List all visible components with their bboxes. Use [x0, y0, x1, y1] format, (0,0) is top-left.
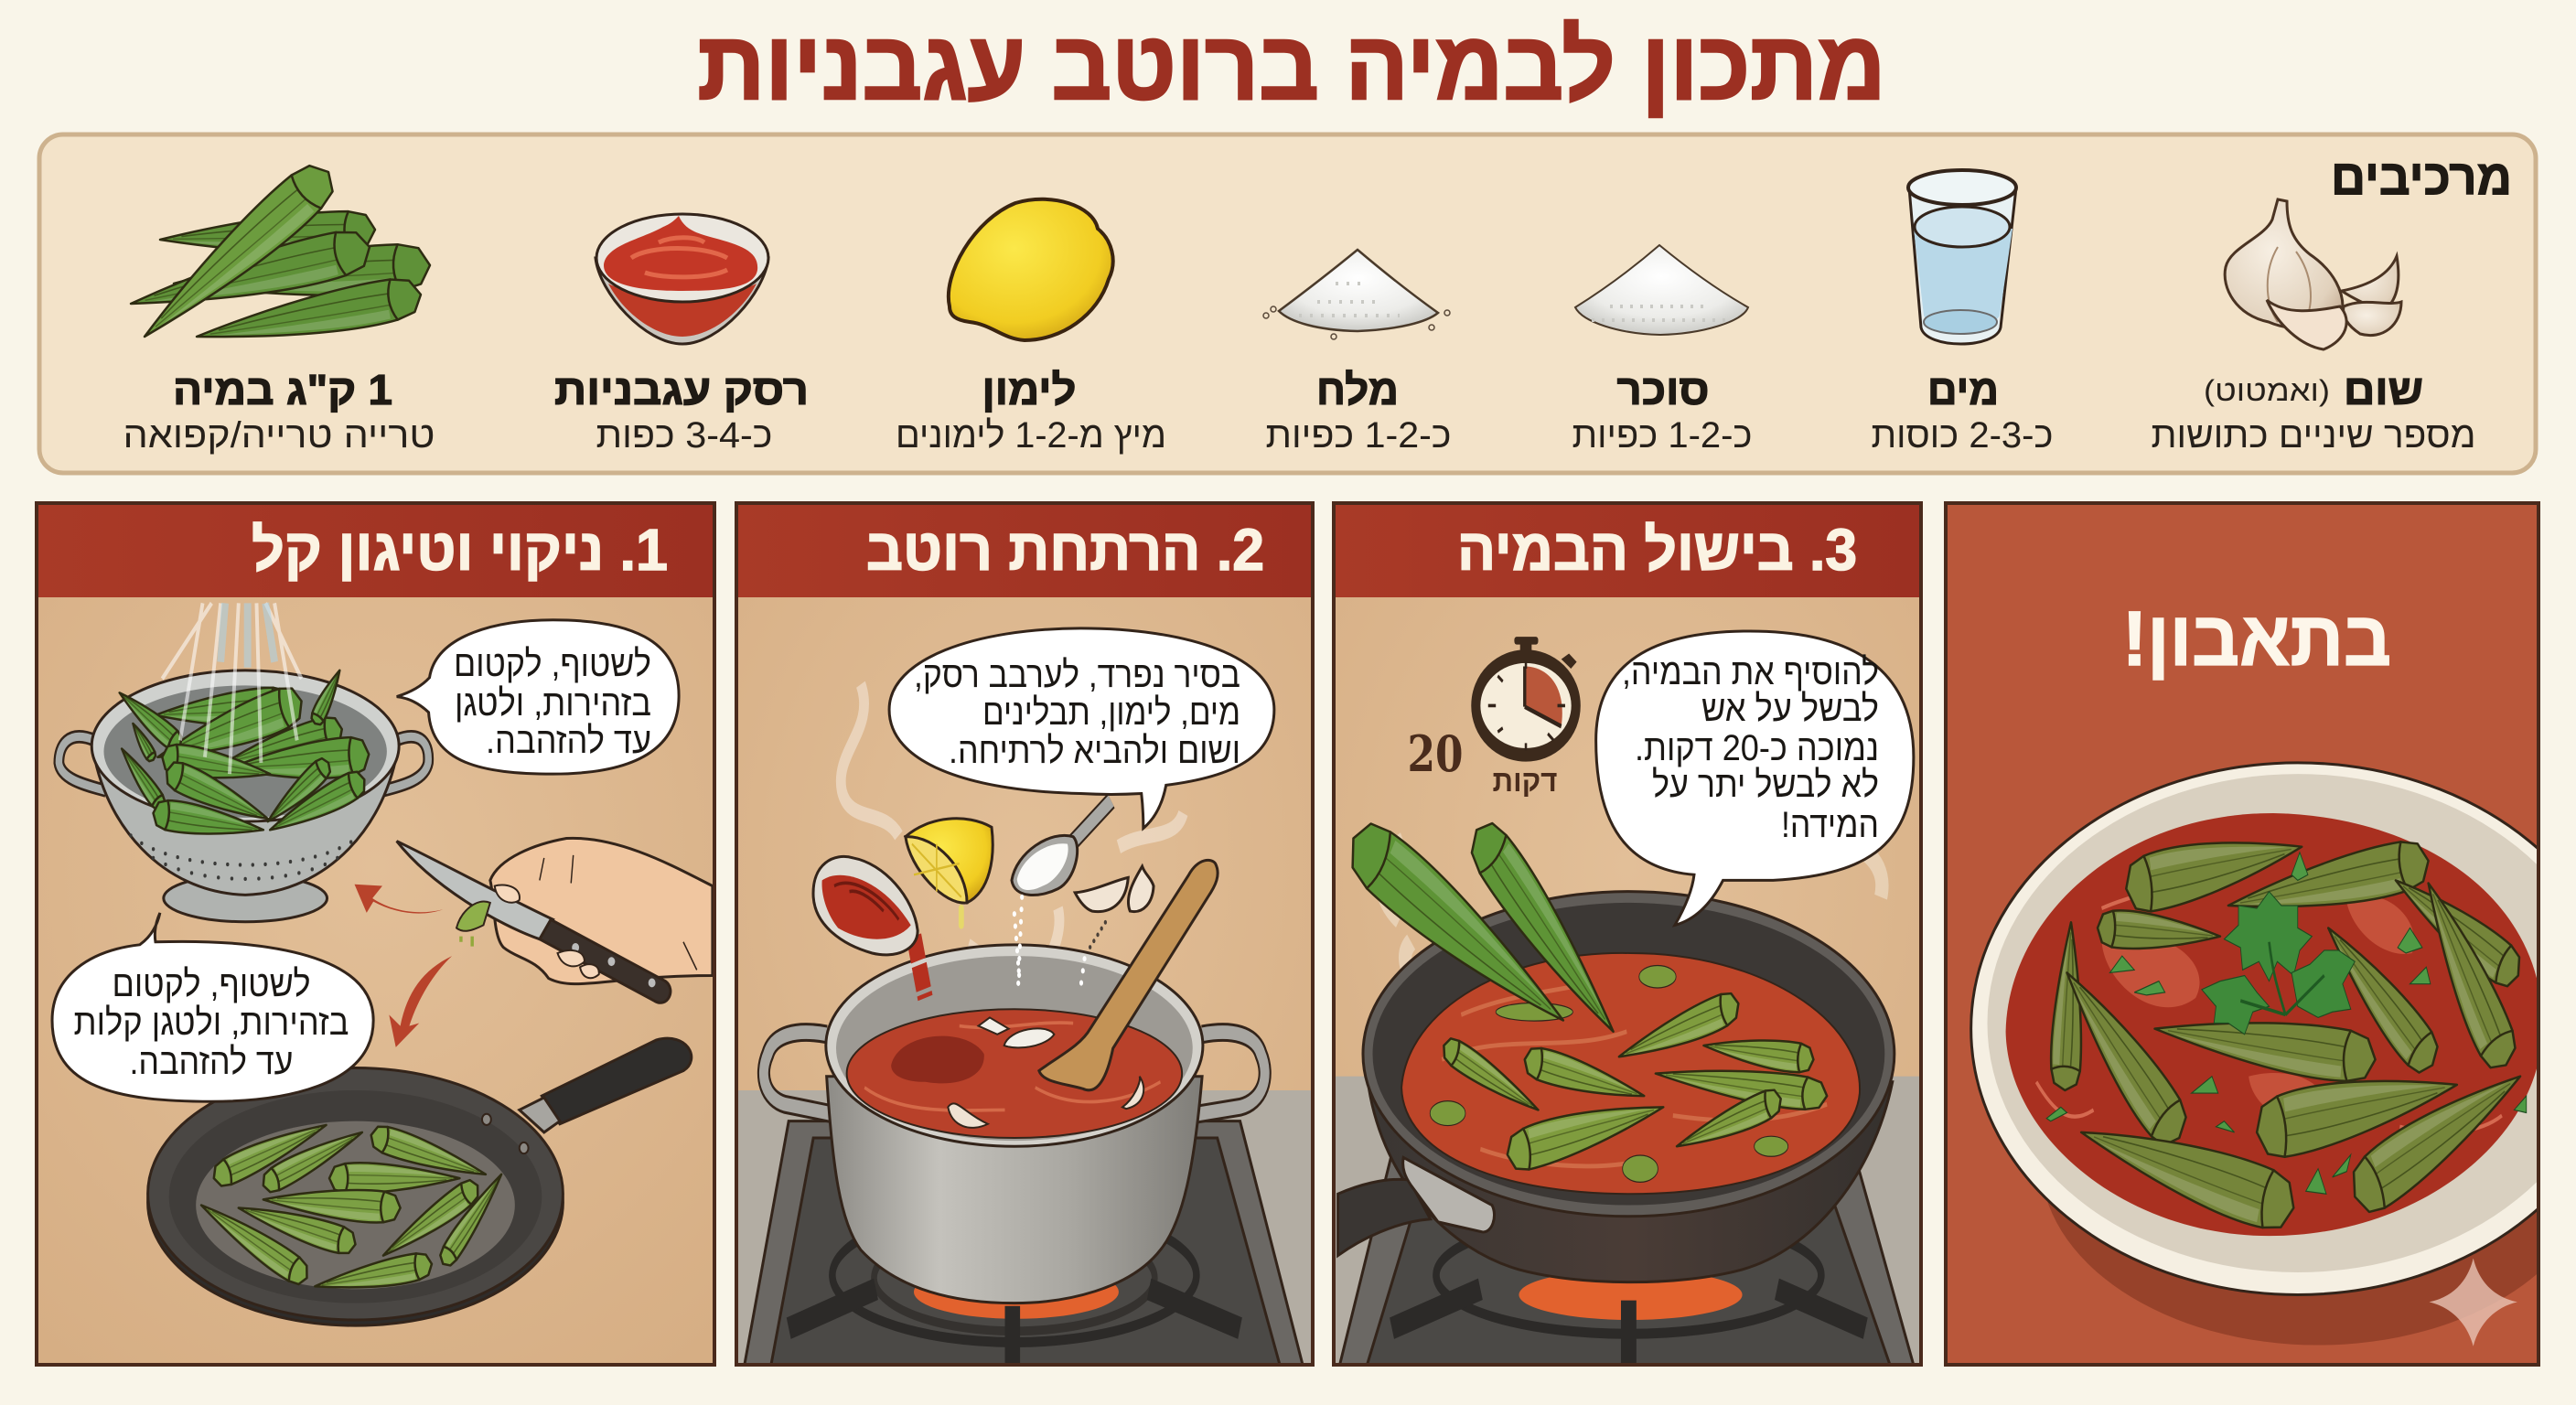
- panel: ingredients: [39, 134, 2536, 473]
- panel: step 1: [37, 503, 714, 1365]
- title: מתכון לבמיה ברוטב עגבניות: [697, 12, 1886, 120]
- callout: step 1 fry: בזהירות, ולטגן קלות: [73, 1003, 349, 1043]
- ingredient: water glass: מים: [1927, 366, 1999, 413]
- callout: step 3: לא לבשל יתר על: [1652, 765, 1879, 805]
- panel: step 2: [732, 503, 1326, 1376]
- callout: step 3: נמוכה כ-20 דקות.: [1635, 728, 1879, 768]
- panel frames: [37, 503, 2538, 1365]
- callout: step 1 fry: לשטוף, לקטום: [112, 964, 311, 1004]
- ingredient: water glass: [1872, 170, 2053, 456]
- callout: step 3: המידה!: [1781, 805, 1879, 845]
- step 1 header: 1. ניקוי וטיגון קל: [252, 517, 668, 583]
- callout: step 1 rinse: עד להזהבה.: [486, 721, 651, 761]
- ingredient: tomato paste: רסק עגבניות: [554, 366, 809, 413]
- ingredient: lemon: [896, 199, 1166, 456]
- callout: step 1 fry: [52, 913, 373, 1101]
- ingredient: okra: [123, 156, 435, 456]
- callout: step 3: להוסיף את הבמיה,: [1622, 652, 1879, 692]
- countertop: [732, 1090, 1326, 1376]
- ingredient: sugar: [1572, 245, 1753, 456]
- icon: pan with sauce: [1338, 809, 1894, 1282]
- icon: pot: [764, 945, 1265, 1303]
- icon: plate of okra stew: [1971, 763, 2576, 1294]
- ingredient: tomato paste: [554, 214, 809, 456]
- icon: garlic cloves: [1075, 866, 1154, 912]
- panel: step 3: [1326, 503, 1930, 1373]
- steam: [1379, 832, 1888, 970]
- stove: [1339, 1158, 1915, 1363]
- callout: step 3: [1596, 631, 1914, 925]
- callout: step 1 rinse: לשטוף, לקטום: [454, 644, 651, 684]
- step 1 header: [37, 503, 714, 597]
- callout: step 1 rinse: [397, 620, 679, 774]
- pan handle: [1338, 1157, 1495, 1256]
- steam: [836, 681, 1187, 947]
- ingredient: water glass: כ-2-3 כוסות: [1872, 415, 2053, 456]
- step 2 header: [736, 503, 1313, 597]
- ingredient: salt: כ-1-2 כפיות: [1266, 415, 1451, 456]
- ingredient: lemon: לימון: [982, 366, 1076, 413]
- arrow: to colander: [355, 885, 443, 914]
- icon: cilantro garnish: [2046, 853, 2527, 1194]
- ingredient: okra: 1 ק"ג במיה: [173, 366, 392, 413]
- ingredient: garlic: [2152, 199, 2475, 456]
- callout: step 1 fry: עד להזהבה.: [130, 1042, 293, 1082]
- sparkle: [2430, 1259, 2517, 1346]
- closing text: בתאבון!: [2122, 595, 2391, 681]
- icon: timer: [1476, 637, 1577, 755]
- callout: step 3: לבשל על אש: [1701, 689, 1879, 729]
- callout: step 2: ושום ולהביא לרתיחה.: [949, 731, 1240, 771]
- ingredient: okra: טרייה טרייה/קפואה: [123, 415, 435, 456]
- callout: step 2: מים, לימון, תבלינים: [982, 692, 1240, 733]
- step 2 header: 2. הרתחת רוטב: [866, 517, 1264, 583]
- ingredient: lemon: מיץ מ-1-2 לימונים: [896, 415, 1166, 456]
- timer label: minutes: דקות: [1493, 764, 1557, 798]
- ingredient: salt: [1263, 250, 1451, 456]
- ingredient: garlic: (ואמטוט): [2204, 374, 2330, 407]
- ingredient: sugar: כ-1-2 כפיות: [1572, 415, 1753, 456]
- ingredient: salt: מלח: [1316, 366, 1399, 413]
- stove: [743, 1121, 1304, 1372]
- icon: spoon of sugar: [1012, 800, 1111, 987]
- ingredient: sugar: סוכר: [1617, 366, 1709, 413]
- heading: ingredients: מרכיבים: [2331, 150, 2512, 205]
- icon: colander with okra: [59, 603, 428, 922]
- icon: lemon half: [906, 819, 993, 925]
- icon: frying pan with okra: [148, 1038, 692, 1325]
- callout: step 2: בסיר נפרד, לערבב רסק,: [914, 655, 1240, 695]
- icon: hand with knife: [397, 838, 713, 1003]
- callout: step 2: [889, 628, 1274, 828]
- bowl shadow: [2041, 975, 2576, 1346]
- panel: serving: [1946, 503, 2576, 1365]
- ingredient: tomato paste: כ-3-4 כפות: [596, 415, 772, 456]
- ingredient: garlic: שום: [2344, 366, 2423, 413]
- icon: tomato paste bowl: [813, 856, 925, 998]
- callout: step 1 rinse: בזהירות, ולטגן: [455, 683, 651, 724]
- icon: wooden spoon: [1039, 860, 1218, 1090]
- ingredient: garlic: מספר שיניים כתושות: [2152, 415, 2475, 456]
- step 3 header: [1334, 503, 1921, 597]
- step 3 header: 3. בישול הבמיה: [1457, 517, 1857, 583]
- countertop: [1326, 1077, 1930, 1373]
- arrow: to pan: [389, 956, 452, 1047]
- timer label: 20: 20: [1407, 724, 1464, 783]
